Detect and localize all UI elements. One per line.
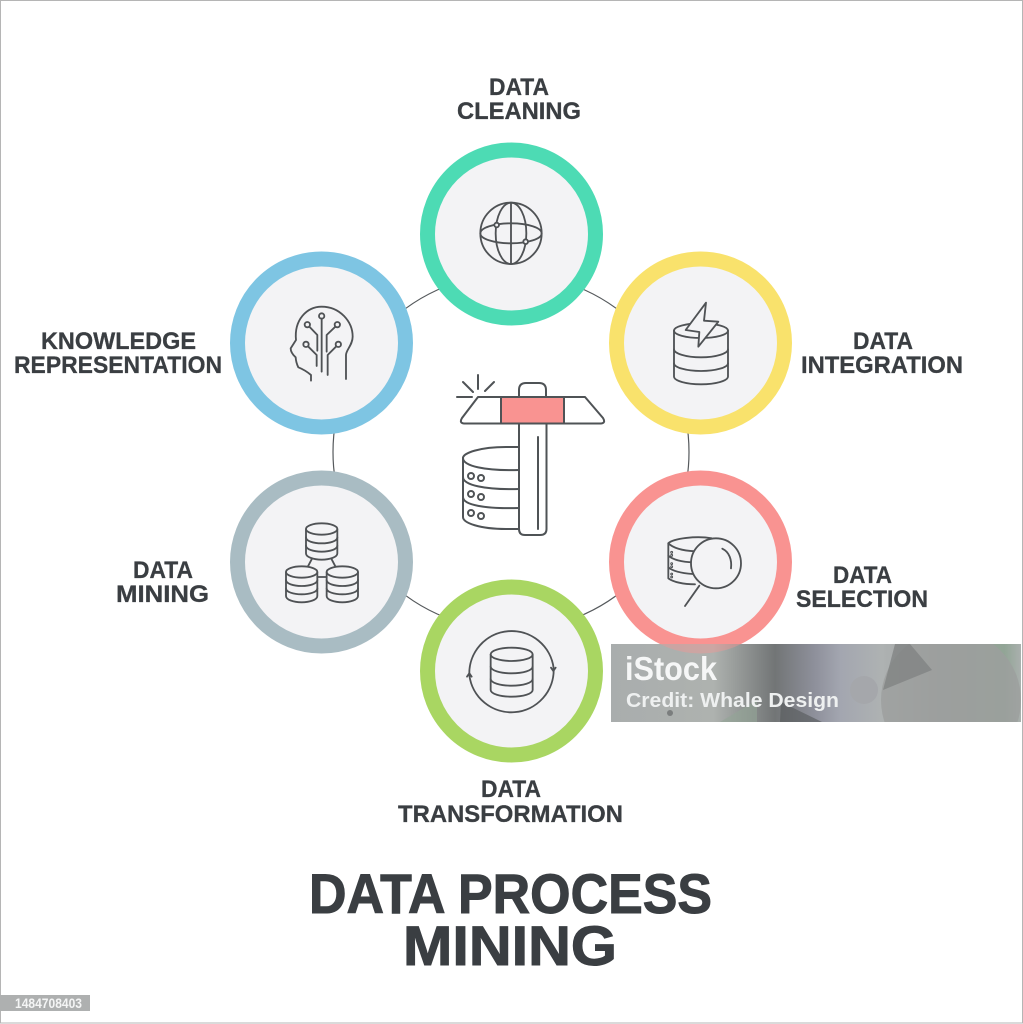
label: data cleaning: DATA <box>489 74 549 101</box>
node: data transformation circle <box>428 587 596 755</box>
label: data transformation <box>398 776 623 828</box>
watermark logo text: iStock <box>625 650 718 687</box>
node: data cleaning circle <box>428 150 596 318</box>
label: data transformation: TRANSFORMATION <box>398 801 623 828</box>
node: knowledge representation circle <box>238 259 406 427</box>
watermark credit text: Credit: Whale Design <box>626 690 839 712</box>
label: data selection <box>796 562 928 613</box>
label: data integration: INTEGRATION <box>801 352 963 379</box>
label: data cleaning: CLEANING <box>457 98 581 125</box>
node: data selection circle <box>616 478 784 646</box>
node: data mining circle <box>238 478 406 646</box>
label: knowledge representation: REPRESENTATION <box>14 352 222 379</box>
label: data mining <box>116 557 209 608</box>
center icon: pickaxe with database <box>457 375 604 535</box>
label: data selection: DATA <box>833 562 892 589</box>
image id tag: 1484708403 <box>15 996 82 1011</box>
watermark: iStock credit <box>611 644 1021 722</box>
label: knowledge representation <box>14 328 222 379</box>
icon: database with cycle arrows <box>467 631 556 712</box>
label: data cleaning <box>457 74 581 125</box>
icon: head with circuit brain <box>291 307 353 381</box>
node: data integration circle <box>616 259 784 427</box>
title <box>309 862 712 977</box>
label: knowledge representation: KNOWLEDGE <box>41 328 196 355</box>
label: data integration <box>801 328 963 379</box>
icon: database with magnifier <box>668 537 741 606</box>
connector ring <box>333 274 689 630</box>
label: data integration: DATA <box>853 328 913 355</box>
title: DATA PROCESS <box>309 862 712 925</box>
icon: database with lightning bolt <box>674 303 728 384</box>
icon: three connected databases <box>286 523 358 602</box>
title: MINING <box>403 914 617 977</box>
label: data transformation: DATA <box>481 776 541 803</box>
icon: globe <box>480 203 542 264</box>
label: data selection: SELECTION <box>796 586 928 613</box>
label: data mining: MINING <box>116 581 209 608</box>
label: data mining: DATA <box>133 557 193 584</box>
